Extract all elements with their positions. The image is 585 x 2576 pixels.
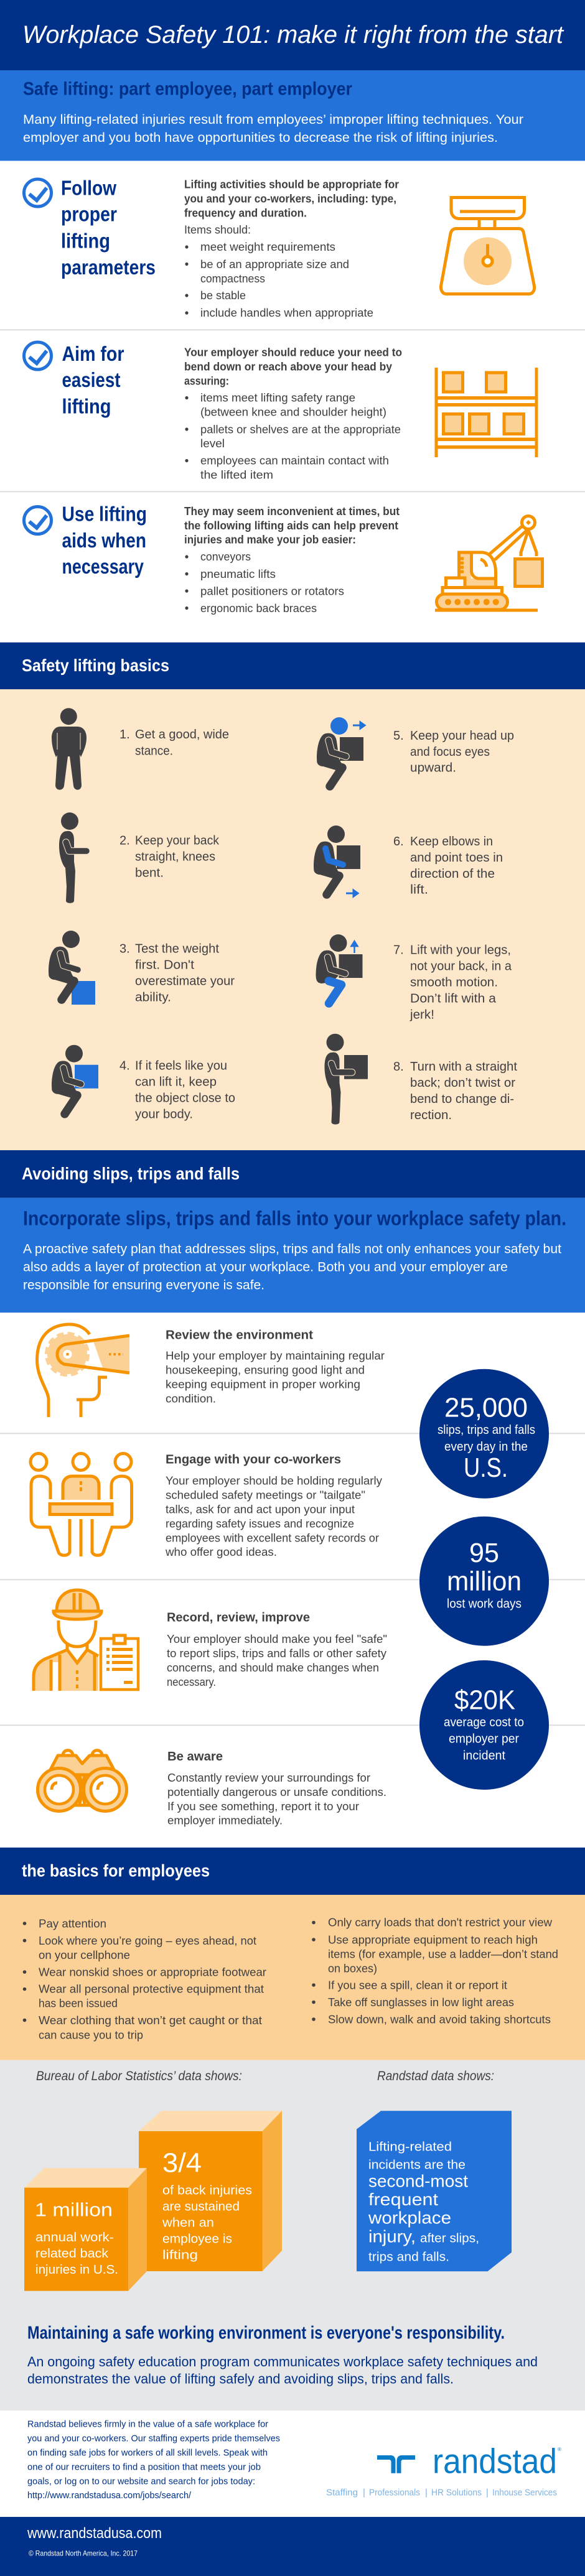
icon: crane <box>435 516 543 612</box>
title banner: Workplace Safety 101: make it right from the start <box>22 21 564 49</box>
text block: lifting aids: pneumatic lifts <box>200 568 276 580</box>
chart: 1 million orange box: related back <box>35 2247 109 2261</box>
list: right column: Take off sunglasses in low light areas <box>328 1996 514 2009</box>
step 4: your body. <box>135 1108 193 1122</box>
list: right column: items (for example, use a ladder—don’t stand <box>328 1947 558 1960</box>
step 7: smooth motion. <box>410 975 498 989</box>
text block: review the environment <box>166 1350 385 1405</box>
footer <box>0 2517 585 2576</box>
stat circle: $20K: employer per <box>449 1732 519 1746</box>
text block: about randstad: you and your co-workers. Our staffing experts pride themselves <box>27 2434 280 2443</box>
text block: reduce need to bend: employees can maintain contact with <box>200 455 389 467</box>
step 8: rection. <box>410 1109 452 1122</box>
text block: be aware: employer immediately. <box>167 1815 283 1827</box>
callout: randstad blue box: trips and falls. <box>368 2250 449 2264</box>
list: right column: If you see a spill, clean it or report it <box>328 1979 507 1992</box>
list: left column: has been issued <box>39 1997 118 2010</box>
panel: review the environment <box>37 1324 385 1417</box>
chart: 3/4 orange box: employee is <box>162 2232 232 2246</box>
panel: aim for easiest lifting <box>24 342 538 481</box>
title banner <box>0 0 585 70</box>
text block: be aware: If you see something, report it to your <box>167 1800 359 1813</box>
list: right column: Slow down, walk and avoid taking shortcuts <box>328 2012 551 2025</box>
heading: aim for easiest lifting: Aim for <box>62 342 124 365</box>
panel: data section <box>0 2060 585 2411</box>
step 7: not your back, in a <box>410 959 512 973</box>
callout: randstad blue box: workplace <box>368 2208 451 2227</box>
step 5: upward. <box>410 761 456 775</box>
panel: safe lifting intro: Safe lifting: part employee, part employer <box>23 78 352 100</box>
stat circle: 25,000: 25,000 <box>444 1393 528 1423</box>
step 8: Turn with a straight <box>410 1060 517 1074</box>
panel: safe lifting intro: employer and you both have opportunities to decrease the risk of lifting injuries. <box>23 131 498 145</box>
text block: lifting aids: injuries and make your job easier: <box>184 534 356 546</box>
step 6: 6. <box>393 835 404 849</box>
list: left column: Pay attention <box>39 1917 106 1930</box>
step 7: jerk! <box>410 1008 434 1021</box>
callout: randstad blue box: after slips, <box>420 2231 479 2245</box>
heading: follow proper lifting parameters: proper <box>61 203 117 226</box>
list: right column: on boxes) <box>328 1961 377 1974</box>
chart: 3/4 orange box: when an <box>162 2216 214 2230</box>
panel: safe lifting intro <box>0 70 585 160</box>
panel: safe lifting intro: Many lifting-related injuries result from employees’ improper lifting techniques. Your <box>23 113 523 127</box>
step 3: 3. <box>119 942 130 956</box>
panel: incorporate slips, trips and falls <box>0 1198 585 1313</box>
stat circle: 95 million: million <box>447 1566 522 1597</box>
step 5 <box>317 717 514 786</box>
heading: aim for easiest lifting <box>62 342 124 418</box>
step 2 <box>59 812 220 903</box>
text block: lifting activities <box>184 178 399 319</box>
step 8: 8. <box>393 1060 404 1074</box>
heading: follow proper lifting parameters: lifting <box>61 229 110 252</box>
step 5: Keep your head up <box>410 729 514 743</box>
step 1 <box>52 708 229 790</box>
text block: reduce need to bend: the lifted item <box>200 468 273 481</box>
panel: record, review, improve <box>34 1590 387 1691</box>
text block: lifting aids: the following lifting aids can help prevent <box>184 519 398 532</box>
list: left column: Wear clothing that won’t get caught or that <box>39 2014 262 2027</box>
list: right column: Use appropriate equipment to reach high <box>328 1933 538 1946</box>
step 6: direction of the <box>410 867 495 881</box>
heading: use lifting aids when necessary: necessary <box>62 555 144 578</box>
text block: lifting activities: include handles when appropriate <box>200 307 373 319</box>
text block: engage with your co-workers <box>165 1475 382 1558</box>
step 8: back; don’t twist or <box>410 1076 515 1090</box>
stat circle: 95 million: 95 <box>469 1538 499 1568</box>
step 4 <box>52 1045 235 1122</box>
text block: engage with your co-workers: employees with excellent safety records or <box>166 1532 379 1544</box>
step 1: stance. <box>135 744 173 758</box>
text block: reduce need to bend: level <box>200 437 225 450</box>
text block: about randstad: Randstad believes firmly in the value of a safe workplace for <box>27 2420 268 2430</box>
heading: use lifting aids when necessary: aids when <box>62 529 146 552</box>
heading: aim for easiest lifting: lifting <box>62 395 111 418</box>
icon: scale <box>441 198 535 294</box>
heading: aim for easiest lifting: easiest <box>62 368 121 391</box>
text block: lifting activities: frequency and duration. <box>184 207 307 219</box>
step 6: Keep elbows in <box>410 835 493 849</box>
callout: randstad blue box: second-most <box>368 2172 468 2191</box>
step 5: and focus eyes <box>410 745 490 759</box>
step 6 <box>314 825 503 897</box>
text block: lifting aids: pallet positioners or rotators <box>200 585 344 597</box>
step 8 <box>325 1034 517 1124</box>
panel: be aware <box>37 1749 386 1827</box>
section header: avoiding slips, trips and falls <box>0 1150 585 1198</box>
text block: lifting activities: Lifting activities should be appropriate for <box>184 178 399 190</box>
step 2: 2. <box>119 834 130 848</box>
step 7 <box>316 934 512 1021</box>
text block: lifting activities: Items should: <box>184 224 251 236</box>
step 4: 4. <box>119 1059 130 1073</box>
text block: review the environment: condition. <box>166 1392 216 1405</box>
icon: figure holding blue box <box>52 1045 98 1114</box>
stat circle: $20K <box>419 1660 549 1790</box>
icon: head with gear and flashlight <box>37 1324 129 1417</box>
icon: check circle <box>24 506 51 534</box>
text: service lines: | <box>363 2488 365 2498</box>
icon: shelves with boxes <box>435 368 538 457</box>
step 4: the object close to <box>135 1092 235 1105</box>
step 8: bend to change di- <box>410 1092 514 1106</box>
section header: the basics for employees <box>0 1848 585 1895</box>
icon: three co-workers at table <box>30 1453 132 1556</box>
stat circle: 25,000: U.S. <box>464 1453 508 1483</box>
text block: lifting activities: be of an appropriate size and <box>200 258 349 271</box>
heading: bureau of labor statistics: Bureau of Labor Statistics’ data shows: <box>36 2069 242 2083</box>
panel: engage with your co-workers <box>30 1453 382 1558</box>
stat circle: $20K: $20K <box>454 1685 515 1715</box>
text: service lines: Staffing <box>326 2488 358 2498</box>
step 3: Test the weight <box>135 942 219 956</box>
step 6: and point toes in <box>410 851 503 865</box>
chart: 1 million orange box: annual work- <box>35 2231 114 2244</box>
stat circle: 95 million: lost work days <box>447 1597 522 1611</box>
step 7: Lift with your legs, <box>410 943 511 957</box>
list: left column: can cause you to trip <box>39 2028 143 2041</box>
chart: 3/4 orange box <box>139 2111 282 2271</box>
text block: reduce need to bend: pallets or shelves are at the appropriate <box>200 423 401 435</box>
panel: use lifting aids when necessary <box>24 503 543 615</box>
chart: 3/4 orange box: lifting <box>162 2248 198 2262</box>
panel: incorporate slips, trips and falls: also adds a layer of protection at your workplace. Both you and your employer are <box>23 1260 508 1274</box>
logo: randstad: ® <box>558 2447 561 2452</box>
section header: avoiding slips, trips and falls: Avoiding slips, trips and falls <box>22 1164 240 1183</box>
text block: everyone's responsibility: An ongoing safety education program communicates workplace safety techniques and <box>27 2354 538 2369</box>
heading: review the environment: Review the environment <box>166 1328 313 1342</box>
footer: www.randstadusa.com <box>27 2525 162 2542</box>
icon: figure with blue head <box>317 717 365 786</box>
step 5: 5. <box>393 729 404 743</box>
chart: 1 million orange box: 1 million <box>35 2198 113 2220</box>
footer: © Randstad North America, Inc. 2017 <box>29 2549 138 2557</box>
text block: engage with your co-workers: scheduled safety meetings or "tailgate" <box>166 1489 365 1501</box>
text block: record, review, improve: to report slips, trips and falls or other safety <box>167 1647 386 1660</box>
text: service lines: | <box>486 2488 489 2498</box>
step 2: straight, knees <box>135 850 215 863</box>
heading: follow proper lifting parameters: Follow <box>61 176 116 199</box>
text: service lines: HR Solutions <box>431 2488 482 2498</box>
step 3 <box>49 931 235 1005</box>
heading: use lifting aids when necessary: Use lifting <box>62 503 147 525</box>
panel: follow proper lifting parameters <box>24 176 535 319</box>
step 7: Don’t lift with a <box>410 992 497 1005</box>
icon: check circle <box>24 342 51 370</box>
step 3: overestimate your <box>135 975 235 988</box>
text block: record, review, improve: necessary. <box>167 1676 216 1688</box>
text block: lifting activities: you and your co-workers, including: type, <box>184 192 396 205</box>
text block: reduce need to bend: bend down or reach above your head by <box>184 360 392 373</box>
text block: lifting aids: ergonomic back braces <box>200 602 317 615</box>
text block: reduce need to bend: (between knee and shoulder height) <box>200 406 386 418</box>
icon: figure with blue leg <box>316 934 362 1003</box>
section header: safety lifting basics <box>0 643 585 689</box>
text block: review the environment: housekeeping, ensuring good light and <box>166 1364 365 1376</box>
icon: standing figure side <box>59 812 87 903</box>
text: service lines: Inhouse Services <box>492 2488 557 2498</box>
text block: about randstad: goals, or log on to our website and search for jobs today: <box>27 2476 255 2486</box>
text block: about randstad: on finding safe jobs for workers of all skill levels. Speak with <box>27 2448 268 2458</box>
icon: binoculars <box>37 1751 127 1811</box>
callout: randstad blue box: injury, <box>368 2226 416 2246</box>
section header: the basics for employees: the basics for employees <box>22 1861 210 1881</box>
icon: worker with hard hat and clipboard <box>34 1590 138 1691</box>
text block: lifting activities: be stable <box>200 289 246 302</box>
step 3: first. Don't <box>135 959 194 972</box>
text block: about randstad: http://www.randstadusa.com/jobs/search/ <box>27 2491 192 2501</box>
text: service lines: Professionals <box>369 2488 420 2498</box>
list: left column: Look where you’re going – eyes ahead, not <box>39 1934 256 1947</box>
chart: 3/4 orange box: of back injuries <box>162 2183 252 2197</box>
text block: record, review, improve: concerns, and should make changes when <box>167 1662 379 1674</box>
text block: reduce need to bend <box>184 346 402 481</box>
text block: lifting aids: conveyors <box>200 551 251 563</box>
text block: engage with your co-workers: regarding safety issues and recognize <box>166 1517 354 1530</box>
step 3: ability. <box>135 991 171 1005</box>
callout: randstad blue box: incidents are the <box>368 2159 466 2172</box>
step 1: Get a good, wide <box>135 728 229 742</box>
panel: incorporate slips, trips and falls: responsible for ensuring everyone is safe. <box>23 1278 264 1292</box>
text block: about randstad: one of our recruiters to find a position that meets your job <box>27 2462 261 2472</box>
text block: be aware <box>167 1772 386 1827</box>
text block: everyone's responsibility: demonstrates the value of lifting safely and avoiding slips, trips and falls. <box>27 2371 454 2387</box>
list: left column: on your cellphone <box>39 1948 130 1961</box>
text block: engage with your co-workers: Your employer should be holding regularly <box>166 1475 382 1487</box>
list: left column: Wear all personal protective equipment that <box>39 1983 264 1996</box>
chart: 1 million orange box <box>24 2168 147 2291</box>
text block: be aware: potentially dangerous or unsafe conditions. <box>167 1786 386 1798</box>
text block: reduce need to bend: assuring: <box>184 374 229 387</box>
step 4: If it feels like you <box>135 1059 227 1073</box>
chart: 3/4 orange box: 3/4 <box>162 2148 202 2178</box>
list: left column: Wear nonskid shoes or appropriate footwear <box>39 1965 266 1978</box>
panel: incorporate slips, trips and falls: A proactive safety plan that addresses slips, trips and falls not only enhances your safety but <box>23 1242 561 1256</box>
text block: be aware: Constantly review your surroundings for <box>167 1772 370 1784</box>
text: service lines: | <box>425 2488 428 2498</box>
icon: standing figure with box <box>325 1034 368 1124</box>
panel: lifting steps <box>0 689 585 1150</box>
text block: review the environment: keeping equipment in proper working <box>166 1378 360 1390</box>
text block: reduce need to bend: items meet lifting safety range <box>200 392 355 404</box>
icon: check circle <box>24 179 51 207</box>
callout: randstad blue box <box>357 2111 512 2271</box>
step 2: Keep your back <box>135 834 220 848</box>
text block: lifting aids <box>184 505 400 615</box>
icon: figure with blue arm <box>314 825 360 896</box>
stat circle: 25,000 <box>419 1369 549 1499</box>
chart: 3/4 orange box: are sustained <box>162 2200 240 2213</box>
text block: about randstad <box>27 2420 280 2501</box>
step 6: lift. <box>410 883 428 897</box>
step 2: bent. <box>135 866 164 880</box>
panel: employee basics lists <box>0 1895 585 2060</box>
heading: follow proper lifting parameters: parameters <box>61 256 156 279</box>
icon: standing figure front <box>52 708 87 790</box>
text block: record, review, improve: Your employer should make you feel "safe" <box>167 1633 387 1645</box>
section header: safety lifting basics: Safety lifting basics <box>22 656 169 675</box>
text block: reduce need to bend: Your employer should reduce your need to <box>184 346 402 358</box>
step 1: 1. <box>119 728 130 742</box>
list: right column <box>312 1916 558 2025</box>
text block: lifting activities: meet weight requirements <box>200 241 335 253</box>
heading: record, review, improve: Record, review, improve <box>167 1611 310 1625</box>
stat circle: 25,000: slips, trips and falls <box>438 1423 535 1437</box>
logo: randstad: randstad <box>433 2442 557 2481</box>
stat circle: $20K: incident <box>463 1749 505 1762</box>
step 4: can lift it, keep <box>135 1076 217 1089</box>
list: left column <box>23 1917 266 2041</box>
text block: review the environment: Help your employer by maintaining regular <box>166 1350 385 1362</box>
callout: randstad blue box: Lifting-related <box>368 2140 452 2154</box>
heading: follow proper lifting parameters <box>61 176 156 279</box>
text block: engage with your co-workers: talks, ask for and act upon your input <box>166 1503 355 1515</box>
text block: lifting activities: compactness <box>200 272 265 285</box>
list: right column: Only carry loads that don't restrict your view <box>328 1916 553 1929</box>
stat circle: 95 million <box>419 1517 549 1646</box>
chart: 1 million orange box: injuries in U.S. <box>35 2263 118 2277</box>
callout: randstad blue box: frequent <box>368 2190 438 2209</box>
text block: everyone's responsibility <box>27 2323 538 2387</box>
stat circle: 25,000: every day in the <box>444 1440 528 1454</box>
text block: record, review, improve <box>167 1633 387 1688</box>
text block: engage with your co-workers: who offer good ideas. <box>165 1546 277 1558</box>
heading: use lifting aids when necessary <box>62 503 147 578</box>
heading: randstad data: Randstad data shows: <box>377 2069 494 2083</box>
text block: lifting aids: They may seem inconvenient at times, but <box>184 505 400 518</box>
stat circle: $20K: average cost to <box>444 1716 524 1729</box>
icon: figure testing blue box <box>49 931 95 1005</box>
heading: be aware: Be aware <box>167 1749 223 1764</box>
text: service lines <box>326 2488 557 2498</box>
logo: randstad <box>377 2442 561 2481</box>
heading: engage with your co-workers: Engage with your co-workers <box>166 1453 341 1467</box>
step 7: 7. <box>393 943 404 957</box>
